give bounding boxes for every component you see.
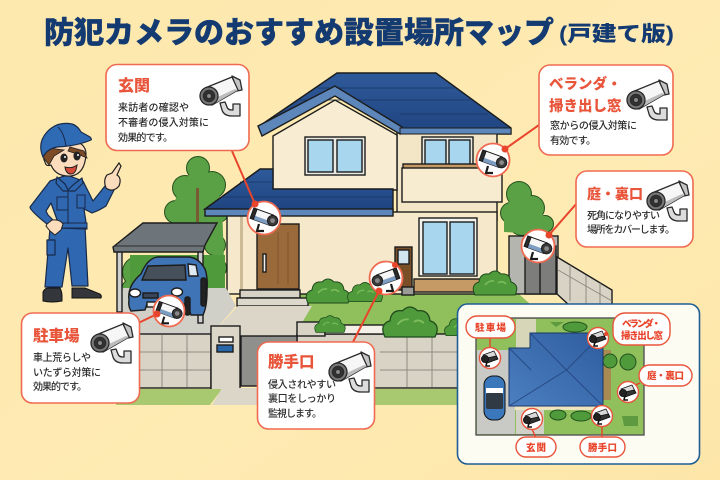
callout: 庭・裏口: 場所をカバーします。 <box>587 223 675 236</box>
marker: 駐車場 <box>130 296 184 327</box>
gate <box>211 326 297 390</box>
callout: ベランダ・掃き出し窓: 有効です。 <box>550 134 596 147</box>
top-down roof <box>509 333 603 406</box>
tree right <box>500 181 554 236</box>
callout: ベランダ・掃き出し窓: 窓からの侵入対策に <box>550 119 637 132</box>
map label: 駐車場: 駐車場 <box>475 322 506 334</box>
callout: 庭・裏口: 庭・裏口 <box>587 186 643 202</box>
upper right window <box>422 137 473 167</box>
callout: 勝手口: 勝手口 <box>268 352 315 371</box>
map label: 勝手口: 勝手口 <box>588 442 617 454</box>
upper wall <box>397 130 497 220</box>
callout: 勝手口: 監視します。 <box>268 407 322 420</box>
callout: ベランダ・掃き出し窓: ベランダ・ <box>549 75 622 93</box>
title: 防犯カメラのおすすめ設置場所マップ <box>44 17 554 50</box>
marker: 勝手口 <box>353 262 402 342</box>
map label: ベランダ・掃き出し窓: ベランダ・ <box>622 318 661 330</box>
callout: 勝手口: 裏口をしっかり <box>268 392 336 405</box>
callout: 玄関: 玄関 <box>118 76 150 95</box>
callout: 勝手口 <box>258 342 374 429</box>
callout: 駐車場: 駐車場 <box>33 326 80 345</box>
lawn <box>300 286 530 336</box>
callout: 駐車場: 車上荒らしや <box>33 351 91 364</box>
map label: ベランダ・掃き出し窓: 掃き出し窓 <box>621 330 663 342</box>
callout: ベランダ・掃き出し窓 <box>505 65 673 155</box>
main roof <box>258 73 511 134</box>
driveway <box>112 288 236 336</box>
callout: 玄関: 効果的です。 <box>118 131 173 144</box>
map label: 庭・裏口 <box>618 365 692 402</box>
deck <box>414 279 480 292</box>
worker character <box>30 123 121 302</box>
lower window <box>419 218 477 276</box>
tree left <box>121 156 229 302</box>
ground strip <box>116 389 222 405</box>
lower wall <box>227 212 497 294</box>
marker: 玄関 <box>248 200 280 234</box>
callout: 勝手口: 侵入されやすい <box>268 378 336 391</box>
site plan <box>476 318 644 435</box>
marker: 庭・裏口 <box>522 230 554 262</box>
service door <box>395 247 414 295</box>
map label: 玄関 <box>516 408 556 457</box>
gable window <box>305 137 365 175</box>
bushes <box>306 271 517 337</box>
callout: 玄関: 来訪者の確認や <box>118 101 189 114</box>
callout: 駐車場: いたずら対策に <box>33 366 101 379</box>
callout: 駐車場 <box>22 313 140 403</box>
callout: 駐車場: 効果的です。 <box>33 380 87 393</box>
marker: ベランダ <box>476 144 510 176</box>
callout: 庭・裏口: 死角になりやすい <box>587 209 660 222</box>
shed <box>509 236 558 294</box>
callout: 玄関: 不審者の侵入対策に <box>118 116 209 129</box>
callout: 玄関 <box>106 64 255 204</box>
callout: ベランダ・掃き出し窓: 掃き出し窓 <box>549 97 622 115</box>
panel: overhead map <box>458 304 700 464</box>
map label: 駐車場 <box>466 316 515 368</box>
front door <box>257 224 299 289</box>
car <box>129 257 207 315</box>
carport <box>113 223 217 323</box>
illustration: house and yard <box>100 73 612 405</box>
map label: 玄関: 玄関 <box>526 442 546 454</box>
right side wall <box>557 257 612 306</box>
front fence <box>100 322 467 388</box>
top-down car <box>484 376 505 420</box>
callout: 庭・裏口 <box>549 171 693 247</box>
steps <box>237 290 308 306</box>
map label: 庭・裏口: 庭・裏口 <box>647 370 684 382</box>
title: (戸建て版) <box>559 23 674 46</box>
balcony <box>402 164 502 202</box>
map label: ベランダ・掃き出し窓 <box>588 313 670 348</box>
lower roof <box>205 169 393 216</box>
map label: 勝手口 <box>580 406 625 457</box>
gable trim <box>258 86 402 136</box>
